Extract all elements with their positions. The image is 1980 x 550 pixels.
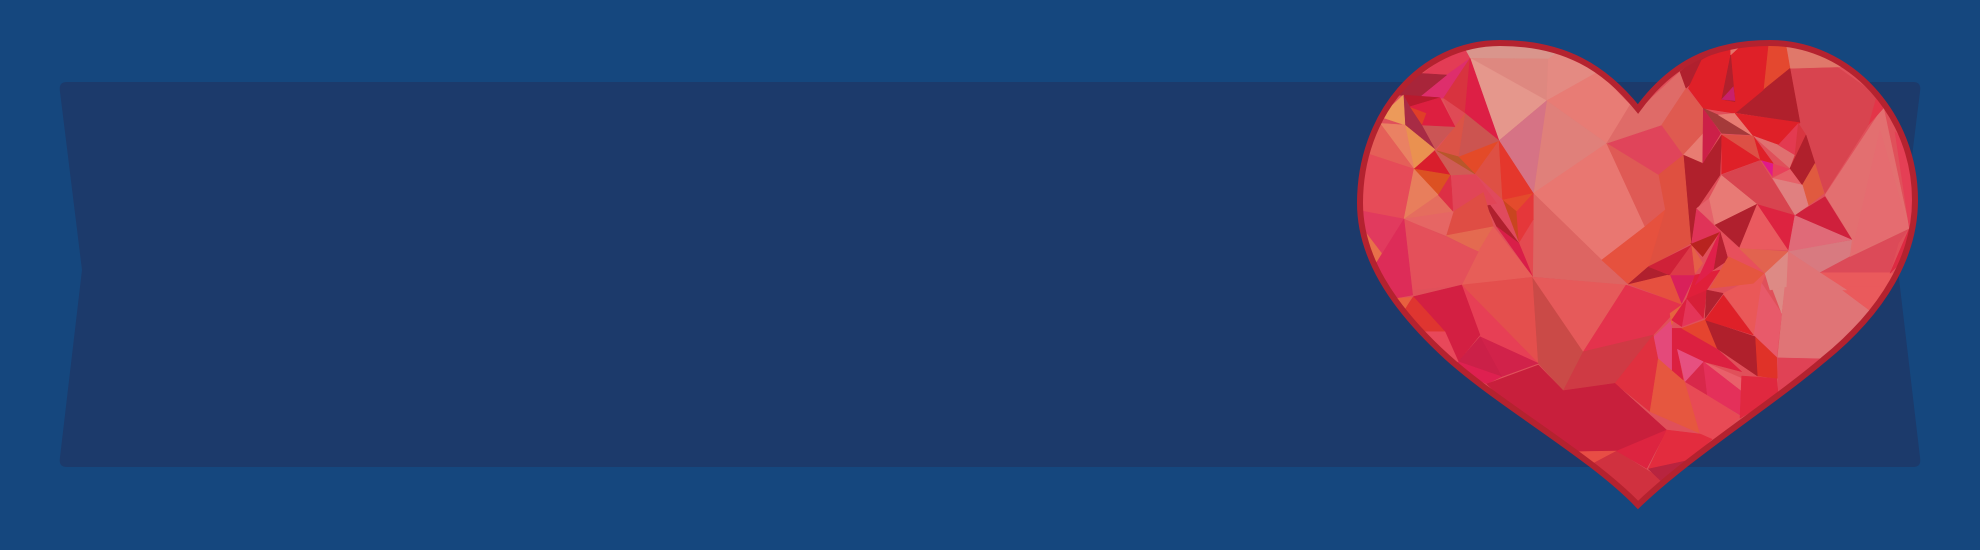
panel: dark ribbon xyxy=(60,82,1920,467)
icon: low-poly heart xyxy=(1357,40,1920,510)
heart base fill xyxy=(1360,43,1915,505)
heart facets xyxy=(1357,40,1920,510)
heart outline xyxy=(1360,43,1915,505)
facets: upper left lobe xyxy=(1357,43,1645,298)
facets: lower left xyxy=(1395,277,1682,510)
facets: lower right xyxy=(1628,270,1893,483)
facets: upper right lobe xyxy=(1602,40,1920,290)
